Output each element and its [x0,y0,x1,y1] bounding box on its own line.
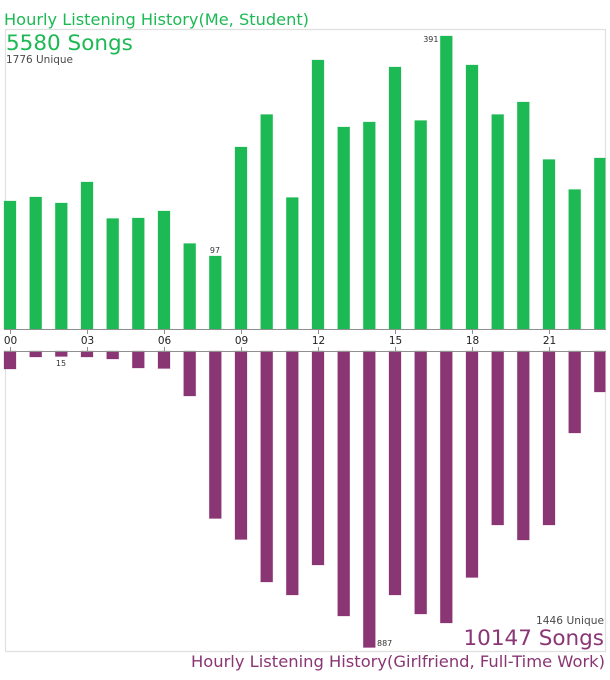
bar chart: girlfriend, hourly [4,351,605,648]
title: me: Hourly Listening History(Me, Student) [4,10,309,29]
value label: 887: 887 [377,639,392,648]
hour axis labels: 15 [389,335,402,347]
hour axis labels: 21 [543,335,556,347]
bar chart: me, hourly [4,36,605,329]
hour axis labels: 03 [81,335,94,347]
unique count: girlfriend: 1446 Unique [536,615,604,627]
unique count: me: 1776 Unique [6,54,73,66]
total songs: girlfriend: 10147 Songs [463,626,604,651]
hour axis labels: 06 [158,335,171,347]
value label: 97: 97 [210,246,220,255]
axis lines and ticks [4,329,606,352]
hour axis labels: 09 [235,335,248,347]
total songs: me: 5580 Songs [6,31,133,56]
value label: 15: 15 [56,359,66,368]
hour axis labels: 00 [4,335,17,347]
hour axis labels: 12 [312,335,325,347]
value label: 391: 391 [423,35,438,44]
hour axis labels [4,335,556,347]
title: girlfriend: Hourly Listening History(Girlfriend, Full-Time Work) [191,652,605,671]
hour axis labels: 18 [466,335,479,347]
